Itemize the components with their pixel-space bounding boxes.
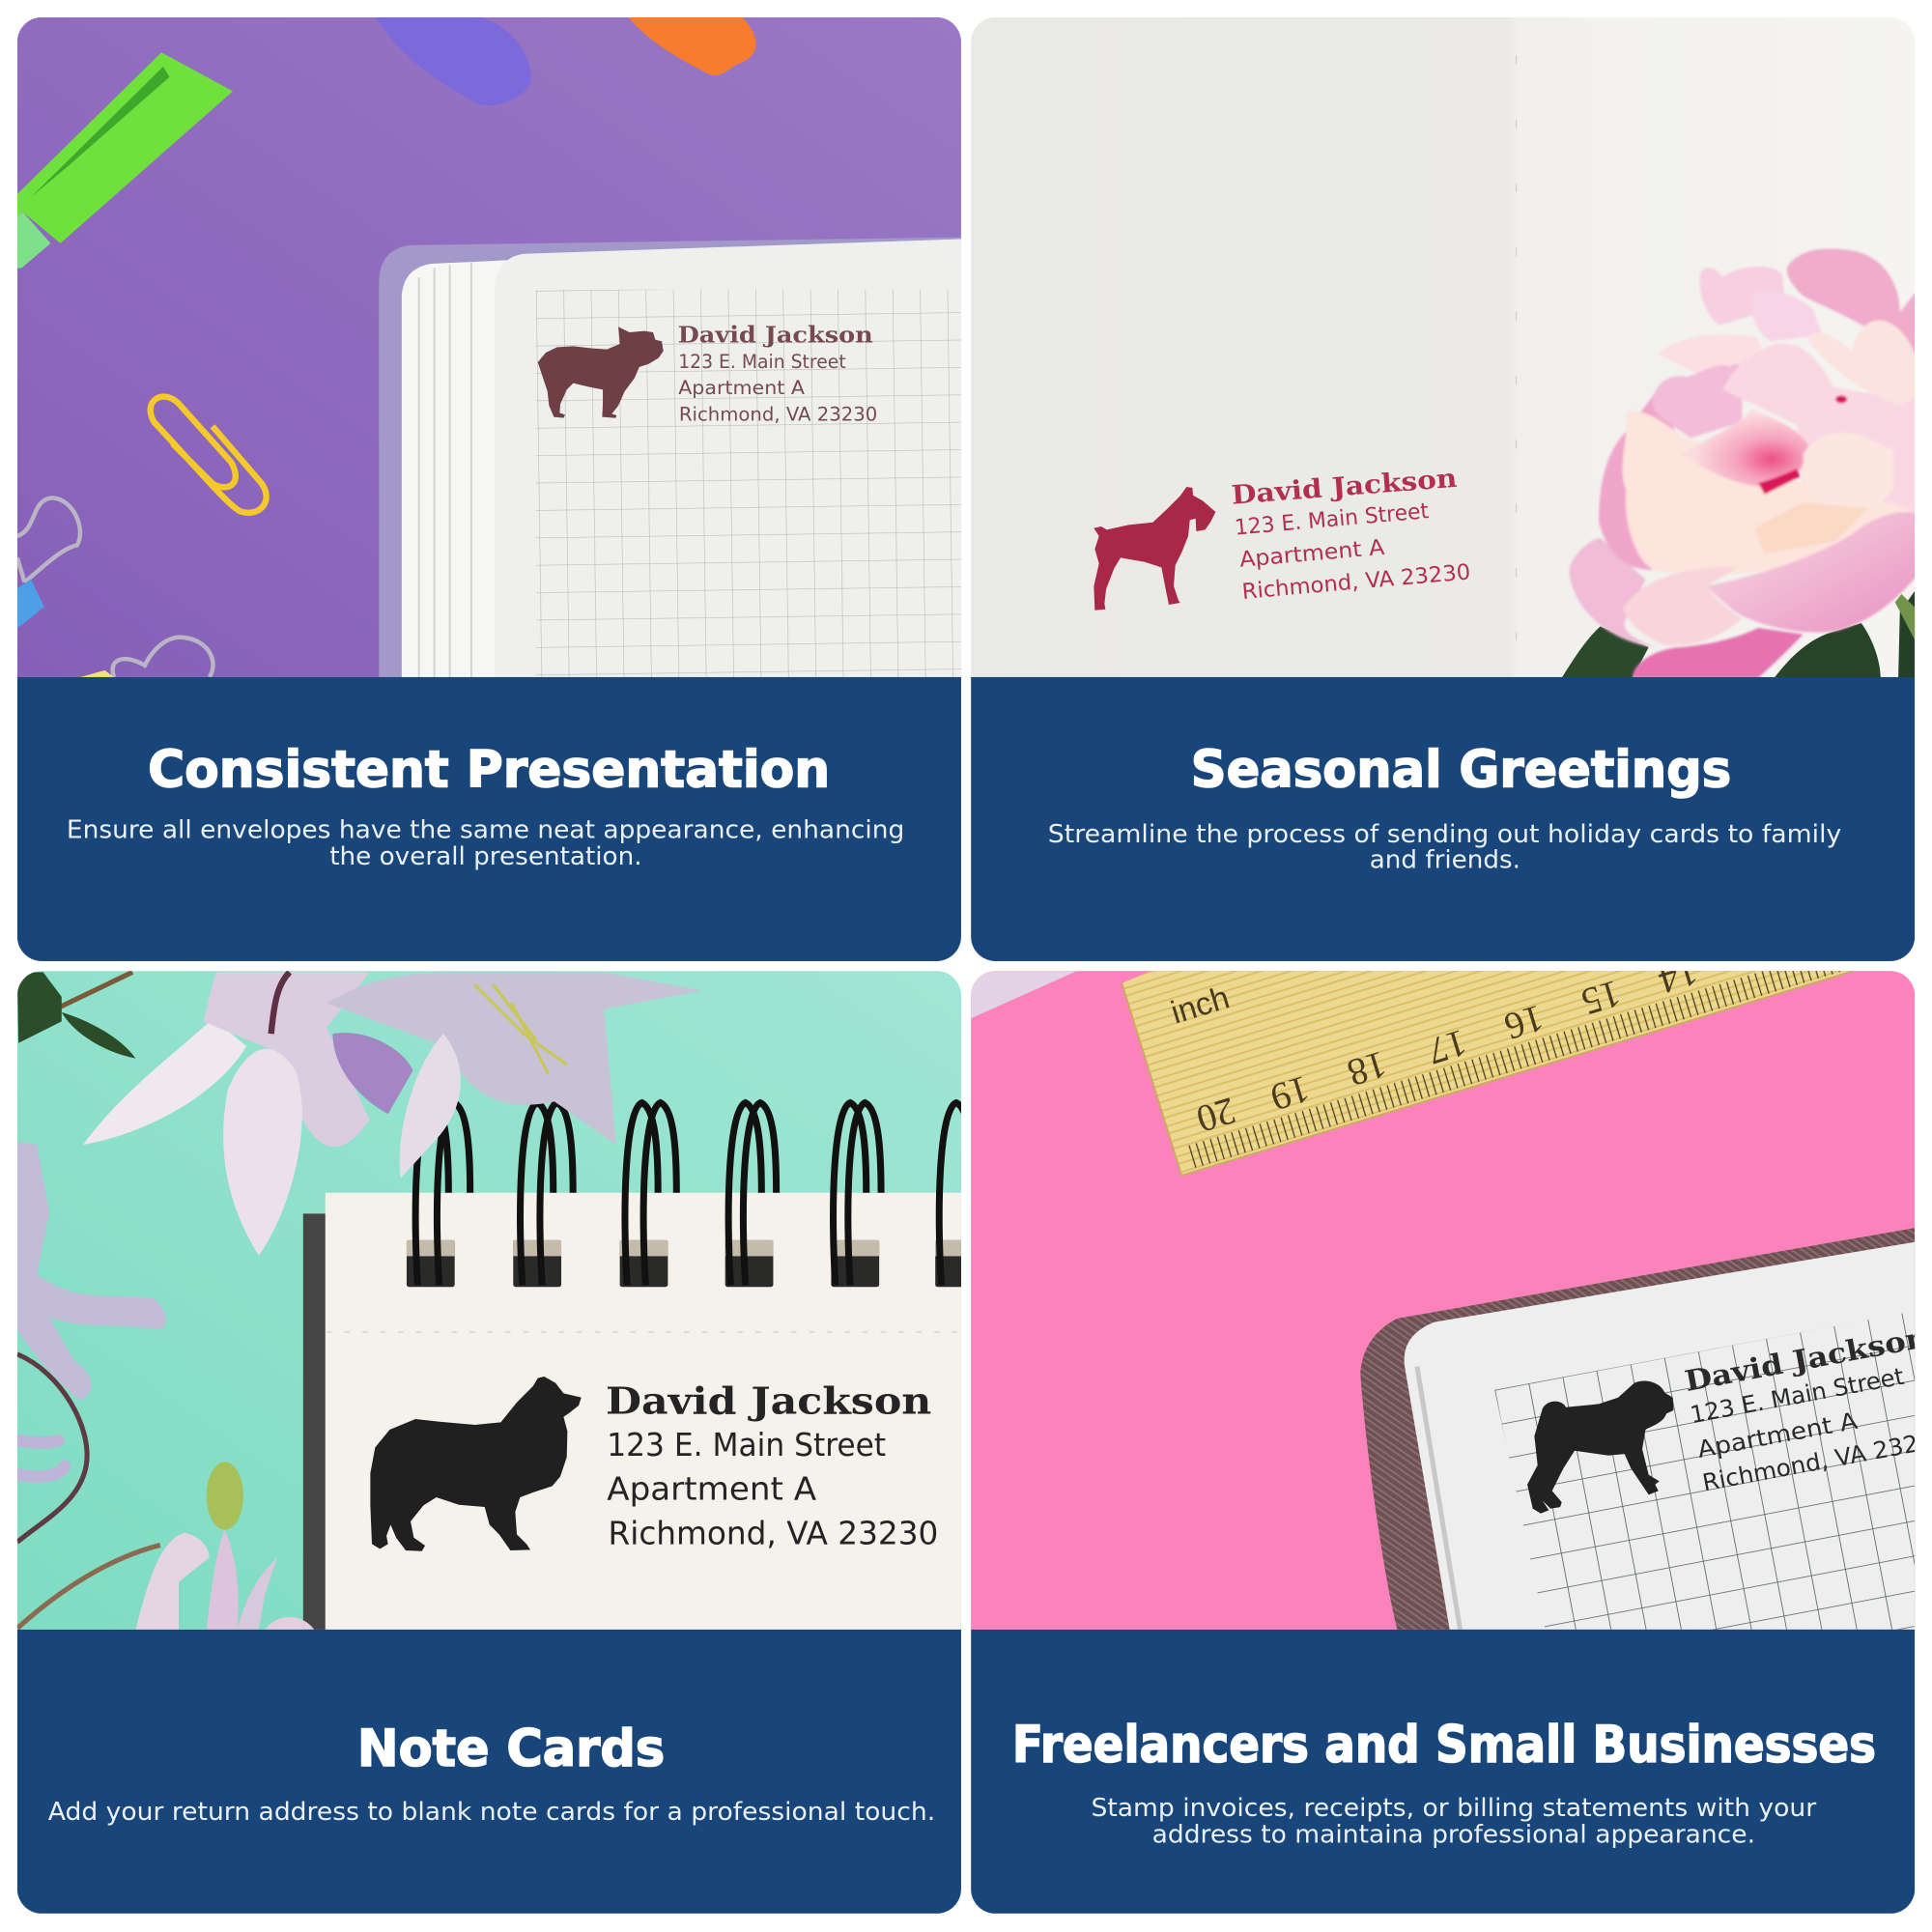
stamp: address text: Apartment A <box>607 1470 816 1507</box>
stamp: bulldog silhouette <box>538 327 664 418</box>
photo: pink desk with ruler and notebook <box>971 928 1932 1644</box>
photo: greeting card with peony <box>971 17 1922 678</box>
card: Freelancers and Small Businesses <box>971 928 1932 1914</box>
ruler: 18 <box>1343 1042 1392 1094</box>
body text: address to maintaina professional appearance. <box>1152 1821 1755 1850</box>
stamp: address text <box>1682 1320 1932 1496</box>
icon: purple clip <box>376 17 530 105</box>
stamp: address text: David Jackson <box>1231 464 1458 511</box>
stamp: address text: 123 E. Main Street <box>678 351 846 373</box>
body text <box>1091 1794 1816 1850</box>
stamp: pug silhouette <box>1527 1380 1673 1514</box>
stamp: schnauzer silhouette <box>1094 487 1215 611</box>
caption panel <box>17 677 961 961</box>
card: Consistent Presentation <box>17 17 967 961</box>
body text: Streamline the process of sending out holiday cards to family <box>1048 820 1841 849</box>
stamp: collie silhouette <box>370 1377 582 1551</box>
peony flower <box>1562 248 1922 678</box>
ruler: 17 <box>1423 1021 1471 1073</box>
photo: spiral notebook and flowers <box>17 971 983 1630</box>
stamp: address text: Apartment A <box>1695 1407 1860 1463</box>
body text: Stamp invoices, receipts, or billing statements with your <box>1091 1794 1816 1823</box>
ruler: 16 <box>1499 997 1548 1048</box>
stamp: address text <box>606 1380 938 1551</box>
stamp: address text: Apartment A <box>1238 535 1386 573</box>
stamp: address text <box>1231 464 1471 605</box>
stamp: address text <box>678 323 877 426</box>
card: Seasonal Greetings <box>971 17 1922 961</box>
body text: the overall presentation. <box>329 842 642 871</box>
flowers <box>17 972 702 1630</box>
stamp: address text: David Jackson <box>1682 1320 1930 1398</box>
body text: Ensure all envelopes have the same neat appearance, enhancing <box>67 815 904 844</box>
body text: Add your return address to blank note cards for a professional touch. <box>48 1798 935 1827</box>
icon: orange clip <box>629 17 756 75</box>
icon: corner object <box>971 971 1077 1018</box>
stamp: address text: 123 E. Main Street <box>1234 498 1430 541</box>
heading: Seasonal Greetings <box>1191 740 1731 799</box>
stamp: address text: 123 E. Main Street <box>607 1427 886 1463</box>
stamp: address text: Richmond, VA 23230 <box>1241 559 1471 605</box>
ruler: inch <box>1167 980 1234 1032</box>
ruler <box>1122 928 1856 1176</box>
stamp: address text: Richmond, VA 23230 <box>609 1515 938 1551</box>
body text: and friends. <box>1370 846 1520 875</box>
stamp: address text: David Jackson <box>678 323 873 349</box>
icon: yellow paperclip <box>151 397 267 513</box>
heading: Note Cards <box>357 1719 665 1778</box>
body text <box>67 815 904 871</box>
stamp: address text: 123 E. Main Street <box>1688 1363 1906 1429</box>
icon: green highlighter <box>17 52 233 268</box>
notebook <box>1360 1228 1927 1644</box>
ruler: 19 <box>1265 1067 1315 1120</box>
caption panel <box>971 1630 1915 1914</box>
notebook <box>379 238 967 684</box>
spiral binding <box>407 1103 983 1287</box>
card: Note Cards <box>17 971 983 1914</box>
caption panel <box>17 1630 961 1914</box>
ruler: 15 <box>1577 972 1626 1024</box>
ruler: 20 <box>1192 1089 1240 1141</box>
stamp: address text: Apartment A <box>678 377 805 399</box>
body text <box>1048 820 1841 875</box>
photo: purple desk with notebook <box>17 17 967 684</box>
icon: binder clips <box>17 497 213 677</box>
ruler: 14 <box>1654 951 1703 1002</box>
caption panel <box>971 677 1915 961</box>
notebook page and cover <box>303 1193 961 1630</box>
stamp: address text: David Jackson <box>606 1380 931 1424</box>
stamp: address text: Richmond, VA 23230 <box>679 404 877 426</box>
heading: Consistent Presentation <box>148 740 830 799</box>
